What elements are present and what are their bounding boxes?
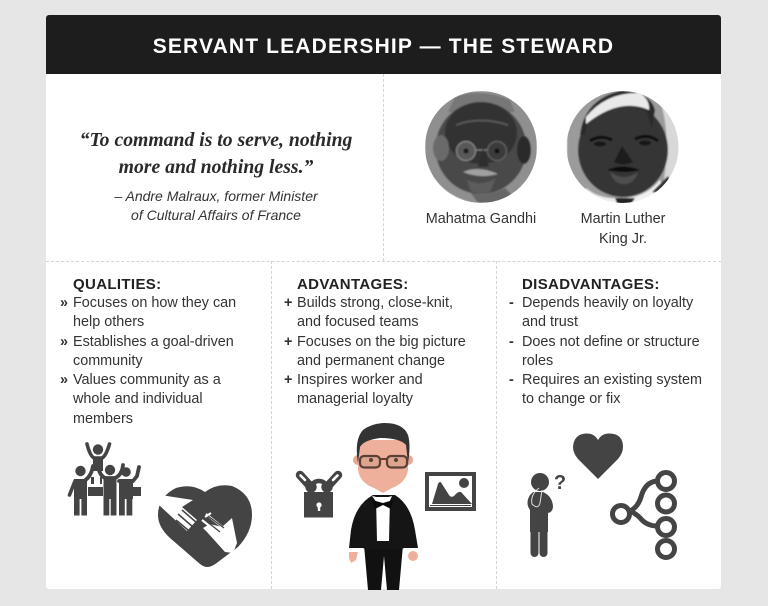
name: Mahatma Gandhi: Mahatma Gandhi <box>426 211 536 227</box>
list: advantages: managerial loyalty <box>297 391 413 407</box>
illustrations layer <box>68 91 678 590</box>
icon: thinking person with question mark: ? <box>554 472 566 494</box>
title <box>46 15 721 74</box>
list: qualities: Values community as a <box>73 372 221 388</box>
name: Martin Luther King Jr.: King Jr. <box>599 231 647 247</box>
list: qualities <box>60 295 236 427</box>
list: advantages: and permanent change <box>297 353 445 369</box>
list: disadvantages: Requires an existing system <box>522 372 702 388</box>
name: Martin Luther King Jr.: Martin Luther <box>581 211 665 227</box>
list: advantages <box>284 295 466 407</box>
list: advantages: and focused teams <box>297 314 419 330</box>
text: » <box>60 334 68 350</box>
list: disadvantages <box>509 295 702 407</box>
list: advantages: Inspires worker and <box>297 372 423 388</box>
list: qualities: whole and individual <box>73 391 203 407</box>
title: SERVANT LEADERSHIP — THE STEWARD <box>153 35 614 58</box>
icon: cheering group <box>70 444 141 516</box>
quote: “To command is to serve, nothing <box>80 129 352 151</box>
icon: chained padlock <box>300 475 338 518</box>
text: » <box>60 372 68 388</box>
text: » <box>60 295 68 311</box>
list: disadvantages: to change or fix <box>522 391 620 407</box>
quote attribution <box>114 188 318 222</box>
list: disadvantages: roles <box>522 353 553 369</box>
list: advantages: Builds strong, close-knit, <box>297 295 453 311</box>
text: - <box>509 334 514 350</box>
icon: heart with helping hands <box>155 485 252 567</box>
heading: advantages: ADVANTAGES: <box>297 276 409 293</box>
text: - <box>509 295 514 311</box>
list: disadvantages: Does not define or structure <box>522 334 700 350</box>
icon: heart <box>573 433 623 479</box>
quote attribution: of Cultural Affairs of France <box>131 206 301 222</box>
heading: disadvantages: DISADVANTAGES: <box>522 276 660 293</box>
icon: thinking person with question mark <box>528 472 566 557</box>
icon: picture frame <box>425 472 476 511</box>
list: disadvantages: and trust <box>522 314 578 330</box>
list: qualities: community <box>73 353 143 369</box>
text: - <box>509 372 514 388</box>
heading: qualities: QUALITIES: <box>73 276 162 293</box>
illustration: man in tuxedo <box>349 423 418 590</box>
quote attribution: – Andre Malraux, former Minister <box>114 188 318 204</box>
quote: more and nothing less.” <box>119 156 313 178</box>
quote <box>80 129 352 178</box>
list: qualities: Establishes a goal-driven <box>73 334 234 350</box>
list: qualities: members <box>73 411 133 427</box>
text: + <box>284 334 292 350</box>
icon: branching nodes <box>612 472 674 558</box>
list: qualities: help others <box>73 314 144 330</box>
list: qualities: Focuses on how they can <box>73 295 236 311</box>
name: Martin Luther King Jr. <box>581 211 666 247</box>
text: + <box>284 295 292 311</box>
text: + <box>284 372 292 388</box>
list: advantages: Focuses on the big picture <box>297 334 466 350</box>
list: disadvantages: Depends heavily on loyalty <box>522 295 693 311</box>
portrait: Martin Luther King Jr. <box>567 91 680 206</box>
portrait: Mahatma Gandhi <box>425 91 537 206</box>
